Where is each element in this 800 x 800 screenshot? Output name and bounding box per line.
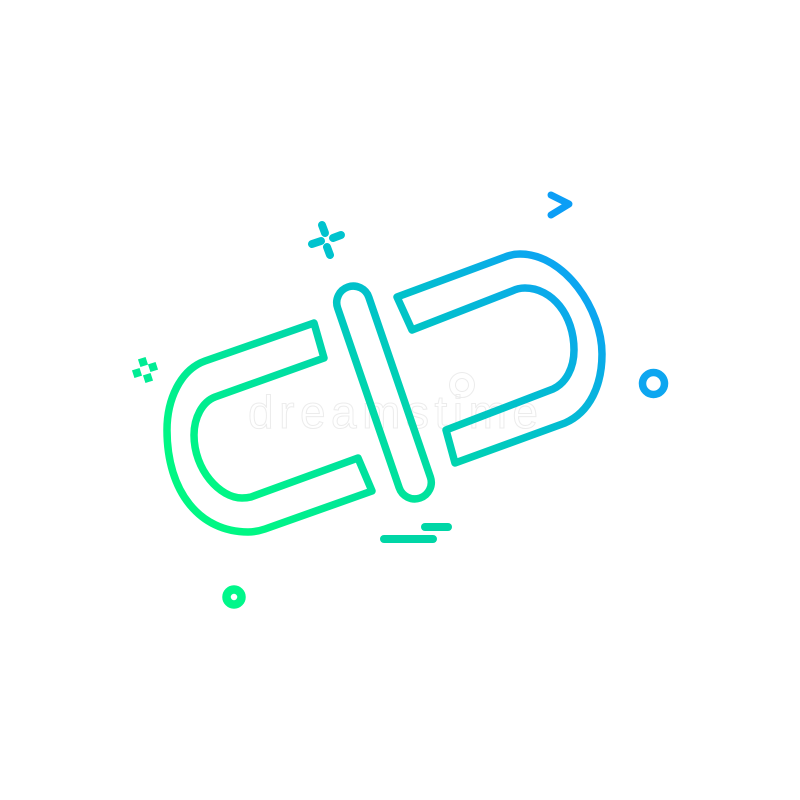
icon: blue ring <box>642 372 664 394</box>
icon: left capsule half <box>167 323 372 532</box>
icon: sparkle cross <box>312 225 341 255</box>
icon: checker diamond <box>132 357 158 383</box>
icon: green ring dot <box>226 590 242 604</box>
icon: right capsule half <box>397 254 602 463</box>
icon: centre divider pill <box>332 282 436 503</box>
icon: speed dashes <box>384 527 448 539</box>
watermark: dreamstime <box>248 386 538 438</box>
icon: chevron arrow <box>551 195 569 215</box>
